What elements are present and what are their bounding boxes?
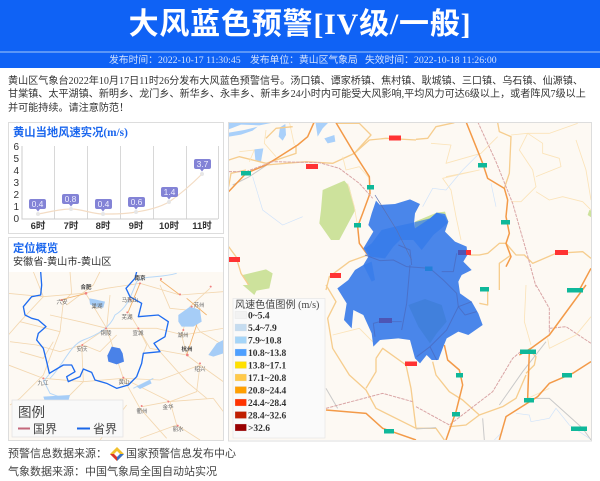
legend: wind speed colour scale: >32.6 [248, 424, 270, 434]
locator map: 芜湖 [121, 313, 133, 321]
legend: wind speed colour scale: 17.1~20.8 [248, 374, 286, 384]
legend: wind speed colour scale: 24.4~28.4 [248, 399, 286, 409]
locator map: 杭州 [181, 345, 193, 353]
line chart: hourly wind speed: 8时 [96, 220, 111, 232]
line chart: hourly wind speed: 7时 [64, 220, 79, 232]
warning body text: 甘棠镇、太平湖镇、新明乡、龙门乡、新华乡、永丰乡、新丰乡24小时内可能受大风影响,平均风力可达6级以上，或者阵风7级以上 [8, 89, 586, 100]
locator map: 宣城 [132, 329, 144, 337]
legend: wind speed colour scale: 风速色值图例 (m/s) [235, 298, 319, 311]
locator map: 湖州 [177, 331, 189, 339]
locator map: 合肥 [80, 283, 92, 291]
line chart: hourly wind speed: 0 [13, 214, 19, 225]
line chart: hourly wind speed: 3 [13, 178, 19, 189]
locator map: 金华 [162, 403, 174, 411]
line chart: hourly wind speed: 10时 [159, 220, 180, 232]
locator map: 安庆 [76, 345, 88, 353]
line chart: hourly wind speed: 3.7 [197, 159, 209, 169]
map base: northeast quadrant [416, 122, 593, 290]
warning body text: 黄山区气象台2022年10月17日11时26分发布大风蓝色预警信号。汤口镇、谭家桥镇、焦村镇、耿城镇、三口镇、乌石镇、仙源镇、 [8, 76, 583, 86]
legend: wind speed colour scale: 0~5.4 [248, 312, 270, 322]
locator map: 巢湖 [91, 302, 103, 310]
line chart: hourly wind speed: 6 [13, 142, 19, 153]
legend: map boundaries [12, 400, 123, 437]
expiry time: 失效时间：2022-10-18 11:26:00 [365, 55, 497, 66]
locator map: 九江 [37, 379, 49, 387]
line chart: hourly wind speed: 1.4 [164, 187, 176, 197]
locator map: 马鞍山 [122, 296, 138, 304]
legend: wind speed colour scale: 20.8~24.4 [248, 386, 286, 396]
legend: map boundaries: 国界 [33, 422, 57, 436]
title: 大风蓝色预警[IV级/一般] [129, 8, 471, 41]
warning area: Huangshan district wind zone [337, 195, 483, 363]
location heading: 定位概览 [13, 241, 58, 255]
panel: location overview [8, 238, 224, 441]
panel: main warning map [228, 122, 593, 441]
legend: wind speed colour scale: 5.4~7.9 [248, 324, 277, 334]
legend: wind speed colour scale: 28.4~32.6 [248, 412, 286, 422]
locator map: 苏州 [193, 301, 205, 309]
legend: wind speed colour scale: 10.8~13.8 [248, 349, 286, 359]
warning body text [8, 75, 586, 114]
locator map: 衢州 [136, 407, 148, 415]
legend: map boundaries: 图例 [18, 405, 45, 420]
panel: wind speed chart [8, 122, 592, 461]
line chart: hourly wind speed [13, 142, 218, 232]
locator map [8, 272, 224, 441]
line chart: hourly wind speed: 4 [13, 166, 19, 177]
map base: southeast quadrant [416, 285, 591, 440]
line chart: hourly wind speed: 0.4 [98, 199, 110, 209]
legend: wind speed colour scale: 13.8~17.1 [248, 362, 286, 372]
highway badges [229, 136, 587, 434]
locator map: 铜陵 [100, 329, 112, 337]
issue time: 发布时间：2022-10-17 11:30:45 [109, 55, 241, 66]
issuing unit: 发布单位：黄山区气象局 [250, 55, 358, 66]
line chart: hourly wind speed: 0.6 [131, 197, 143, 207]
legend: wind speed colour scale: 7.9~10.8 [248, 336, 282, 346]
main map frame [228, 122, 592, 441]
line chart: hourly wind speed: 2 [13, 190, 19, 201]
data source notes: 气象数据来源：中国气象局全国自动站实况 [8, 466, 217, 478]
line chart: hourly wind speed: 0.8 [65, 194, 77, 204]
locator map: 黄山 [118, 378, 130, 386]
locator map: 绍兴 [194, 365, 206, 373]
chart heading: 黄山当地风速实况(m/s) [13, 125, 128, 139]
locator map: 六安 [56, 298, 68, 306]
warning body text: 并可能持续。请注意防范！ [8, 103, 129, 114]
legend: wind speed colour scale [233, 298, 325, 438]
location name: 安徽省-黄山市-黄山区 [13, 255, 111, 268]
line chart: hourly wind speed: 6时 [31, 220, 46, 232]
map base: northwest quadrant [229, 122, 416, 292]
line chart: hourly wind speed: 5 [13, 154, 19, 165]
legend: map boundaries: 省界 [93, 422, 117, 436]
locator map: 丽水 [172, 425, 184, 433]
header divider line [0, 51, 600, 53]
line chart: hourly wind speed: 9时 [129, 220, 144, 232]
locator map: 南京 [134, 274, 146, 282]
header banner [0, 0, 600, 68]
icon: warning centre logo [110, 447, 124, 461]
line chart: hourly wind speed: 11时 [192, 220, 212, 232]
data source notes [8, 448, 236, 478]
data source notes: 预警信息数据来源： 国家预警信息发布中心 [8, 448, 236, 460]
line chart: hourly wind speed: 1 [13, 202, 19, 213]
map base: southwest quadrant [243, 285, 416, 440]
line chart: hourly wind speed: 0.4 [32, 199, 44, 209]
